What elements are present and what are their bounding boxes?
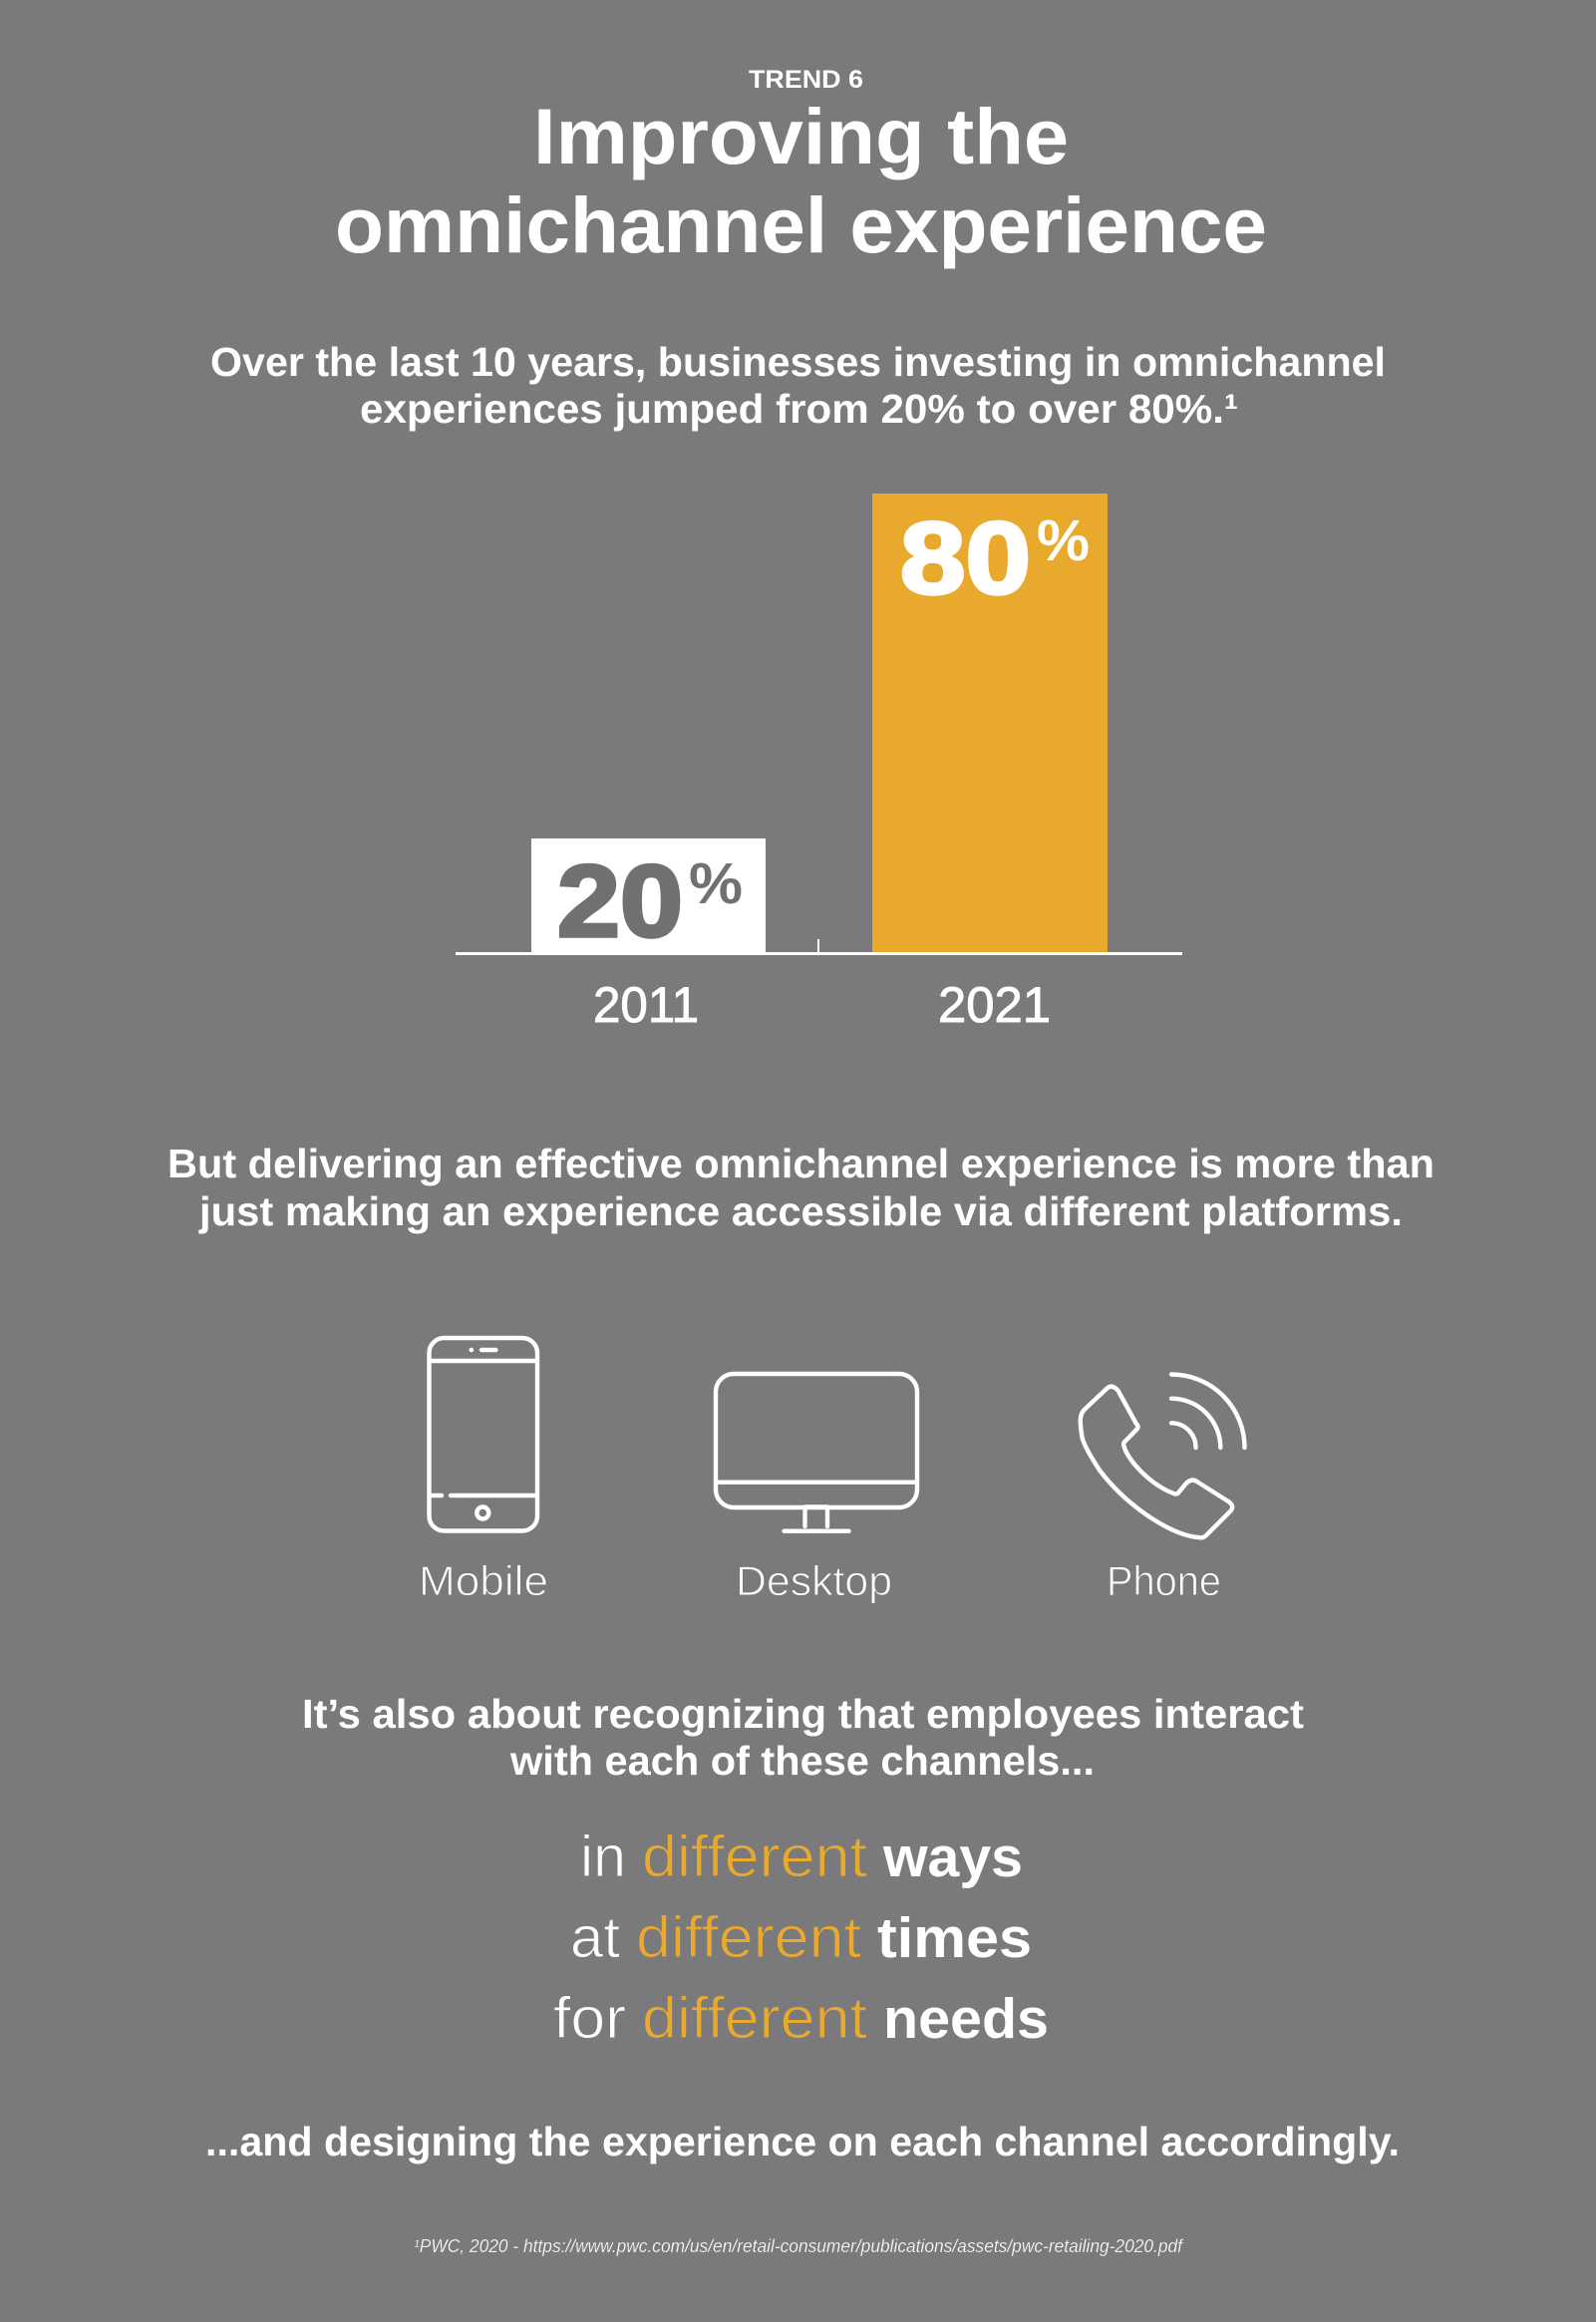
bar: 2011 — [531, 838, 766, 953]
bar: 2021 — [872, 494, 1108, 953]
line: in different ways: in — [580, 1824, 626, 1889]
value label: 80% — [900, 501, 1090, 615]
axis — [456, 952, 1182, 955]
axis label: 2021: 2021 — [938, 977, 1051, 1033]
line: for different needs: different — [642, 1986, 867, 2051]
value label: 80%: 80 — [900, 501, 1031, 615]
value label: 20%: % — [689, 851, 743, 916]
axis label: 2011: 2011 — [593, 977, 699, 1033]
label: Phone — [1107, 1557, 1221, 1604]
bar chart — [456, 494, 1182, 1033]
closing statement: ...and designing the experience on each channel accordingly. — [205, 2119, 1400, 2164]
value label: 80%: % — [1037, 508, 1090, 573]
header — [335, 66, 1267, 269]
icon: phone with signal — [1081, 1374, 1244, 1537]
line: at different times: times — [877, 1906, 1032, 1970]
line: in different ways: different — [642, 1824, 867, 1889]
list of differences — [553, 1824, 1049, 2051]
line: at different times — [570, 1905, 1032, 1970]
value label: 20% — [557, 844, 743, 958]
label: Mobile — [419, 1557, 548, 1604]
explanation text — [302, 1691, 1304, 1784]
explanation text: with each of these channels... — [509, 1738, 1095, 1784]
icon: desktop monitor — [716, 1374, 917, 1531]
channel: mobile — [419, 1338, 548, 1604]
value label: 20%: 20 — [557, 844, 683, 958]
channel: desktop — [716, 1374, 917, 1604]
line: at different times: at — [570, 1905, 620, 1970]
title: omnichannel experience — [335, 180, 1267, 269]
intro text — [210, 339, 1386, 432]
line: in different ways — [580, 1824, 1023, 1889]
line: for different needs — [553, 1986, 1049, 2051]
explanation text: It’s also about recognizing that employees interact — [302, 1691, 1304, 1737]
eyebrow: trend 6: TREND 6 — [749, 66, 863, 94]
intro text: experiences jumped from 20% to over 80%.¹ — [360, 386, 1238, 432]
statement text: But delivering an effective omnichannel experience is more than — [167, 1141, 1435, 1186]
icon: mobile phone — [429, 1338, 537, 1531]
line: for different needs: needs — [883, 1987, 1049, 2051]
line: for different needs: for — [553, 1986, 626, 2051]
line: in different ways: ways — [882, 1825, 1023, 1889]
label: Desktop — [736, 1557, 892, 1604]
statement text: just making an experience accessible via different platforms. — [198, 1188, 1403, 1234]
footnote: ¹PWC, 2020 - https://www.pwc.com/us/en/retail-consumer/publications/assets/pwc-retailing-2020.pdf — [414, 2236, 1184, 2256]
statement text — [167, 1141, 1435, 1234]
title — [335, 92, 1267, 269]
channel: phone — [1081, 1374, 1244, 1604]
line: at different times: different — [636, 1905, 861, 1970]
title: Improving the — [533, 92, 1069, 180]
intro text: Over the last 10 years, businesses investing in omnichannel — [210, 339, 1386, 385]
